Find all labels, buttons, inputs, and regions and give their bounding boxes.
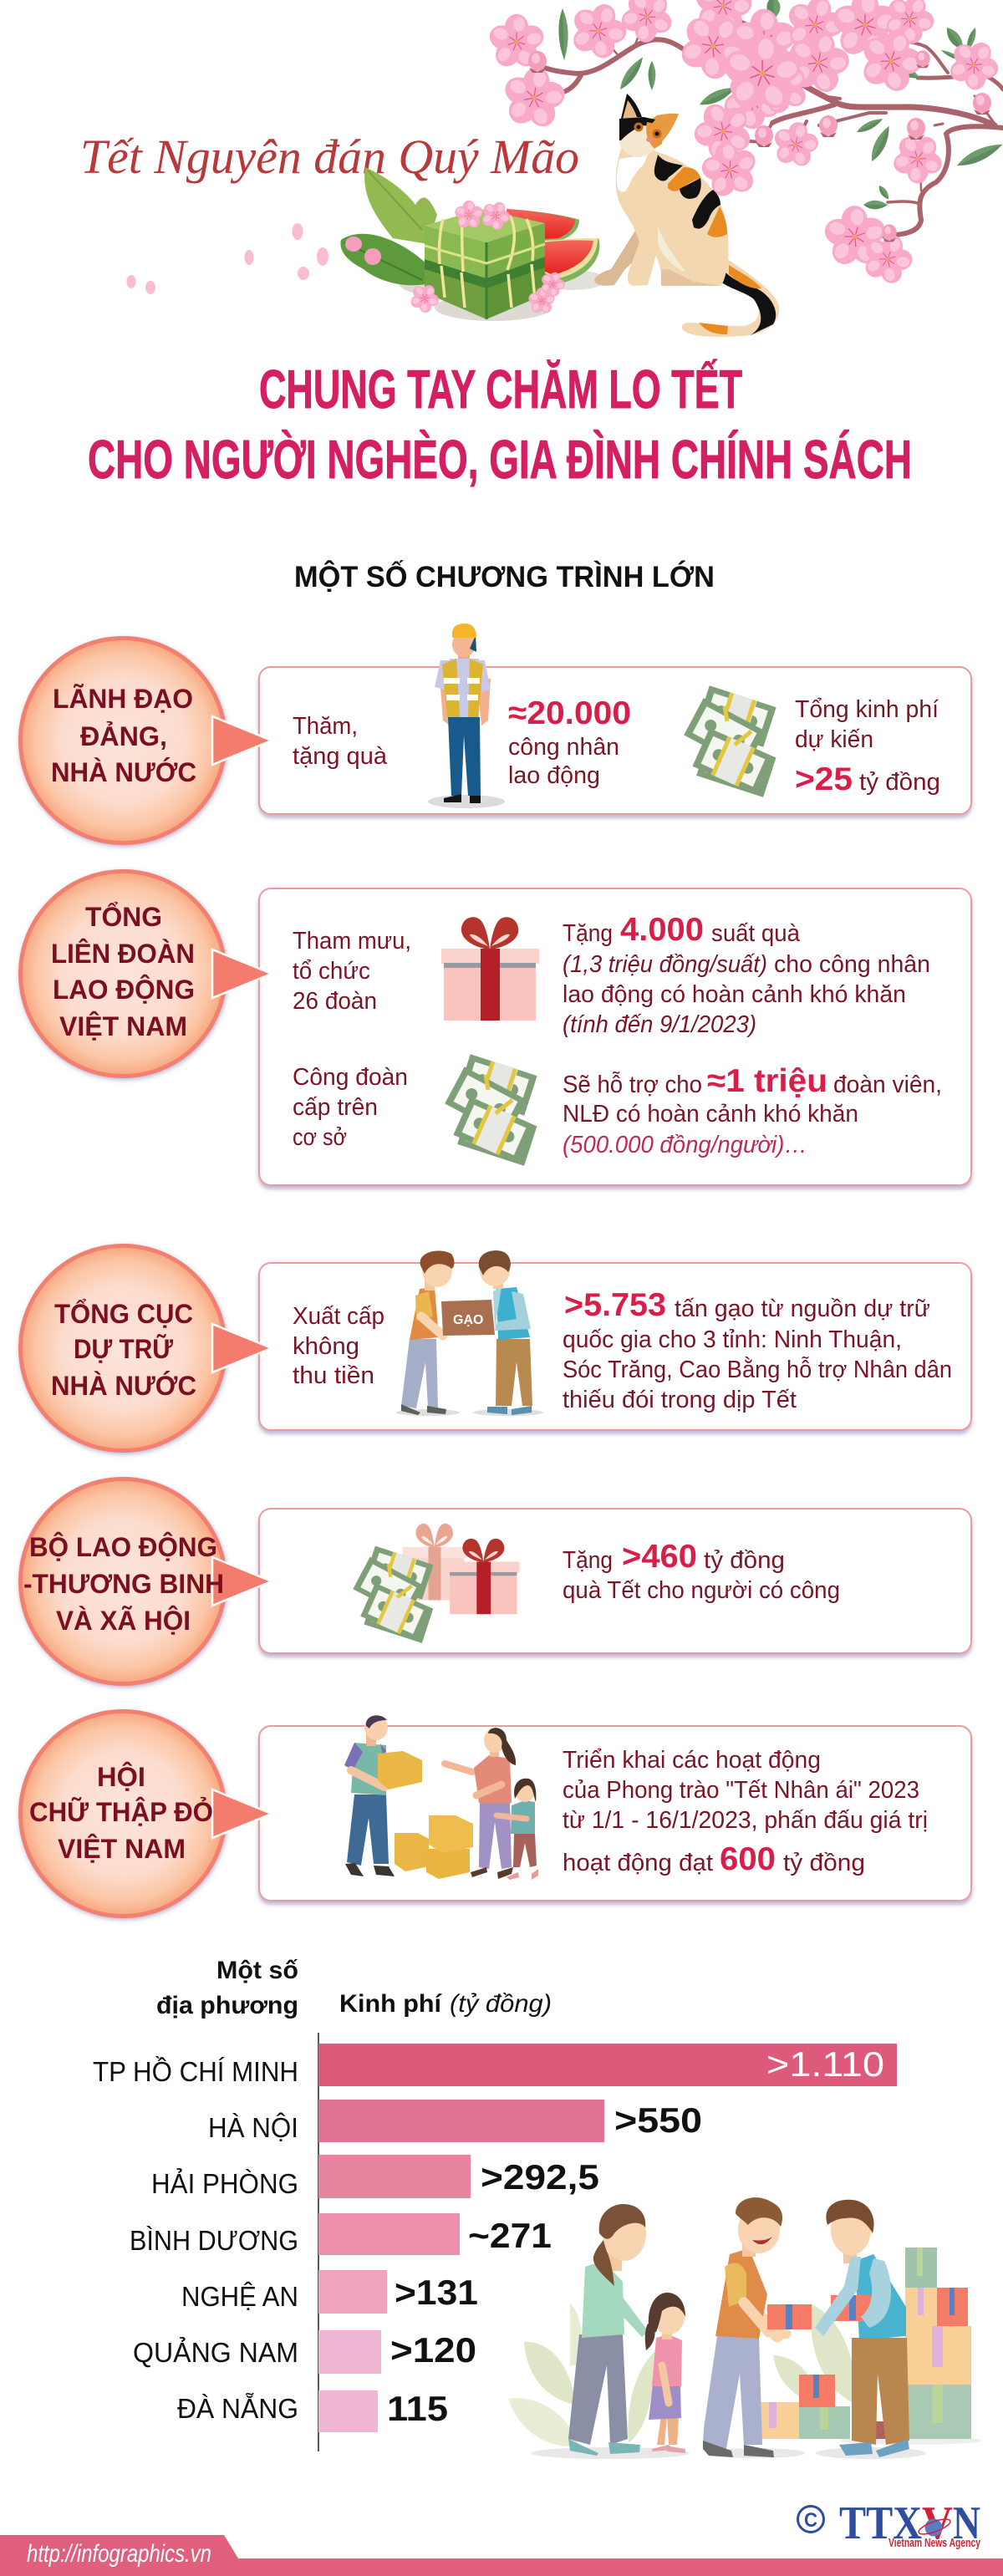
bar: TP Ho Chi Minh: TP HỒ CHÍ MINH [93, 2056, 298, 2087]
row 3 bubble: Tong cuc Du tru Nha nuoc [20, 1245, 272, 1451]
section heading: MỘT SỐ CHƯƠNG TRÌNH LỚN [294, 560, 715, 593]
text: free distribution [293, 1303, 384, 1389]
text: 5.753 tonnes of rice [563, 1287, 952, 1413]
text: Tet Nhan ai campaign: Triển khai các hoạt động [563, 1747, 821, 1774]
text: advising 26 unions: 26 đoàn [293, 988, 377, 1015]
chart header: Kinh phí [339, 1990, 443, 2018]
icon: two men with rice sack [396, 1250, 543, 1416]
bar: TP Ho Chi Minh: >1.110 [766, 2044, 884, 2084]
title: CHUNG TAY CHĂM LO TẾT [259, 359, 742, 420]
row 1 panel [20, 624, 971, 843]
bar: Ha Noi [208, 2100, 702, 2143]
chart header [156, 1957, 552, 2019]
bar: Binh Duong: BÌNH DƯƠNG [130, 2225, 298, 2256]
text: visit and gift [293, 713, 388, 770]
row 4 bubble: Bo Lao dong Thuong binh va Xa hoi: VÀ XÃ HỘI [56, 1606, 191, 1636]
text: 20.000 workers [508, 695, 631, 789]
row 4 bubble: Bo Lao dong Thuong binh va Xa hoi [20, 1479, 272, 1683]
text: Tet Nhan ai campaign: của Phong trào "Tết Nhân ái" 2023 [563, 1777, 919, 1804]
row 2 bubble: Tong Lien doan Lao dong Viet Nam [20, 871, 272, 1077]
text: free distribution: thu tiền [293, 1362, 374, 1389]
row 5 bubble: Hoi Chu thap do Viet Nam: CHỮ THẬP ĐỎ [29, 1797, 213, 1827]
bar: Quang Nam [133, 2330, 476, 2374]
text: Tet Nhan ai campaign: tỷ đồng [783, 1850, 865, 1876]
text: advising 26 unions: Tham mưu, [293, 928, 411, 955]
bar: Da Nang: 115 [387, 2389, 448, 2428]
bar: Da Nang [177, 2389, 448, 2432]
illustration: falling petals [127, 223, 328, 294]
text: 460 billion: quà Tết cho người có công [563, 1577, 840, 1604]
bar: Quang Nam: QUẢNG NAM [133, 2337, 298, 2368]
row 3 bubble: Tong cuc Du tru Nha nuoc: NHÀ NƯỚC [51, 1371, 196, 1401]
text: 5.753 tonnes of rice: tấn gạo từ nguồn dự trữ [675, 1296, 930, 1322]
text: total budget: dự kiến [795, 726, 873, 753]
text: 5.753 tonnes of rice: Sóc Trăng, Cao Bằng hỗ trợ Nhân dân [563, 1356, 952, 1383]
row 4 bubble: Bo Lao dong Thuong binh va Xa hoi: -THƯƠNG BINH [23, 1569, 224, 1599]
text: 4.000 gifts: Tặng [563, 920, 613, 947]
bar: Quang Nam: >120 [390, 2330, 476, 2370]
row 5 bubble: Hoi Chu thap do Viet Nam: VIỆT NAM [58, 1834, 186, 1864]
text: grassroots-level unions [293, 1064, 408, 1151]
text: Tet Nhan ai campaign: hoạt động đạt [563, 1850, 713, 1876]
logo: TTXVN [797, 2497, 980, 2550]
icon: worker [428, 624, 505, 808]
row 1 bubble: Lanh dao Dang, Nha nuoc: LÃNH ĐẠO [53, 684, 193, 714]
logo: TTXVN: TTX [839, 2497, 922, 2549]
text: visit and gift: Thăm, [293, 713, 358, 740]
icon: money [445, 1054, 541, 1173]
bar: TP Ho Chi Minh [93, 2044, 897, 2087]
heading: Tet Nguyen dan Quy Mao: Tết Nguyên đán Quý Mão [80, 130, 579, 184]
text: Tet Nhan ai campaign [563, 1747, 928, 1877]
bar chart [93, 2033, 897, 2451]
text: 460 billion: Tặng [563, 1547, 613, 1574]
text: 1 million members: NLĐ có hoàn cảnh khó khăn [563, 1101, 858, 1128]
text: 4.000 gifts: suất quà [711, 920, 801, 947]
illustration: watermelon and banh chung [340, 167, 606, 321]
row 5 bubble: Hoi Chu thap do Viet Nam: HỘI [97, 1762, 145, 1792]
text: 460 billion: >460 [622, 1539, 697, 1575]
row 1 bubble: Lanh dao Dang, Nha nuoc: ĐẢNG, [80, 721, 167, 751]
row 4 bubble: Bo Lao dong Thuong binh va Xa hoi: BỘ LAO ĐỘNG [29, 1532, 217, 1562]
bar: Binh Duong [130, 2213, 552, 2256]
leaves on branch [558, 0, 1003, 209]
text: 1 million members: ≈1 triệu [707, 1063, 827, 1099]
bar: Hai Phong [151, 2155, 599, 2199]
bar: Da Nang: ĐÀ NẴNG [177, 2393, 298, 2424]
row 5 bubble: Hoi Chu thap do Viet Nam [20, 1712, 272, 1916]
text: total budget: Tổng kinh phí [795, 696, 939, 723]
logo: TTXVN: V [922, 2497, 953, 2549]
text: 4.000 gifts: lao động có hoàn cảnh khó khăn [563, 981, 906, 1008]
text: free distribution: Xuất cấp [293, 1303, 384, 1330]
bar: Ha Noi: HÀ NỘI [208, 2112, 298, 2143]
row 4 panel [20, 1479, 971, 1683]
text: 4.000 gifts: 4.000 [620, 912, 704, 948]
footer: http://infographics.vn [27, 2540, 211, 2568]
text: total budget [795, 696, 940, 797]
illustration: blossom branch [486, 0, 1003, 293]
bar: Nghe An [181, 2270, 478, 2314]
row 2 bubble: Tong Lien doan Lao dong Viet Nam: VIỆT NAM [59, 1011, 187, 1041]
row 2 bubble: Tong Lien doan Lao dong Viet Nam: LAO ĐỘNG [53, 975, 195, 1005]
text: visit and gift: tặng quà [293, 743, 388, 770]
text: grassroots-level unions: cơ sở [293, 1124, 347, 1151]
row 2 bubble: Tong Lien doan Lao dong Viet Nam: LIÊN ĐOÀN [51, 939, 195, 969]
text: 1 million members: đoàn viên, [833, 1072, 942, 1098]
text: 460 billion: tỷ đồng [704, 1547, 785, 1574]
row 1 bubble: Lanh dao Dang, Nha nuoc [20, 639, 272, 843]
row 5 panel [20, 1712, 971, 1916]
logo: TTXVN: N [953, 2497, 980, 2549]
text: grassroots-level unions: cấp trên [293, 1094, 378, 1121]
icon: two men with rice sack: GẠO [453, 1313, 483, 1327]
illustration: family receiving gifts [508, 2197, 982, 2459]
text: grassroots-level unions: Công đoàn [293, 1064, 408, 1091]
text: advising 26 unions: tổ chức [293, 958, 370, 985]
bar: Binh Duong: ~271 [468, 2216, 552, 2255]
row 3 panel [20, 1245, 971, 1451]
text: free distribution: không [293, 1333, 359, 1360]
text: 20.000 workers: công nhân [508, 734, 619, 761]
text: Tet Nhan ai campaign: từ 1/1 - 16/1/2023, phấn đấu giá trị [563, 1807, 928, 1834]
text: 5.753 tonnes of rice: quốc gia cho 3 tỉnh: Ninh Thuận, [563, 1326, 902, 1353]
row 1 bubble: Lanh dao Dang, Nha nuoc: NHÀ NƯỚC [51, 757, 196, 787]
row 3 bubble: Tong cuc Du tru Nha nuoc: TỔNG CỤC [54, 1299, 193, 1329]
chart header: địa phương [156, 1992, 298, 2019]
icon: gift [441, 917, 539, 1021]
bar: Nghe An: NGHỆ AN [181, 2281, 298, 2312]
text: total budget: >25 [795, 761, 853, 797]
text: 4.000 gifts: cho công nhân [774, 951, 930, 978]
icon: family with boxes [344, 1715, 538, 1880]
text: 4.000 gifts: (1,3 triệu đồng/suất) [563, 951, 767, 978]
text: 4.000 gifts: (tính đến 9/1/2023) [563, 1011, 756, 1038]
text: 5.753 tonnes of rice: thiếu đói trong dịp Tết [563, 1387, 797, 1413]
logo: TTXVN: C [804, 2509, 817, 2532]
chart header: Một số [216, 1957, 298, 1984]
text: 4.000 gifts [563, 912, 930, 1038]
bar: Nghe An: >131 [395, 2273, 478, 2312]
bar: Hai Phong: >292,5 [481, 2157, 599, 2197]
text: advising 26 unions [293, 928, 411, 1015]
illustration: calico cat [594, 94, 779, 337]
title [88, 359, 912, 490]
row 2 panel [20, 871, 971, 1185]
bar: Hai Phong: HẢI PHÒNG [151, 2168, 298, 2199]
text: 460 billion [563, 1539, 840, 1604]
text: 20.000 workers: ≈20.000 [508, 695, 631, 731]
footer [0, 2535, 1003, 2576]
text: Tet Nhan ai campaign: 600 [720, 1841, 776, 1877]
text: total budget: tỷ đồng [859, 769, 940, 796]
text: 1 million members: Sẽ hỗ trợ cho [563, 1071, 702, 1098]
row 2 bubble: Tong Lien doan Lao dong Viet Nam: TỔNG [85, 902, 162, 932]
text: 5.753 tonnes of rice: >5.753 [564, 1287, 666, 1323]
blossoms [486, 0, 1003, 293]
text: 1 million members: (500.000 đồng/người)… [563, 1132, 807, 1158]
text: 1 million members [563, 1063, 942, 1158]
bar: Ha Noi: >550 [614, 2100, 702, 2140]
row 3 bubble: Tong cuc Du tru Nha nuoc: DỰ TRỮ [74, 1334, 173, 1364]
icon: gifts and money [353, 1524, 519, 1649]
icon: money [684, 685, 780, 804]
text: 20.000 workers: lao động [508, 762, 600, 789]
chart header: (tỷ đồng) [450, 1990, 552, 2018]
